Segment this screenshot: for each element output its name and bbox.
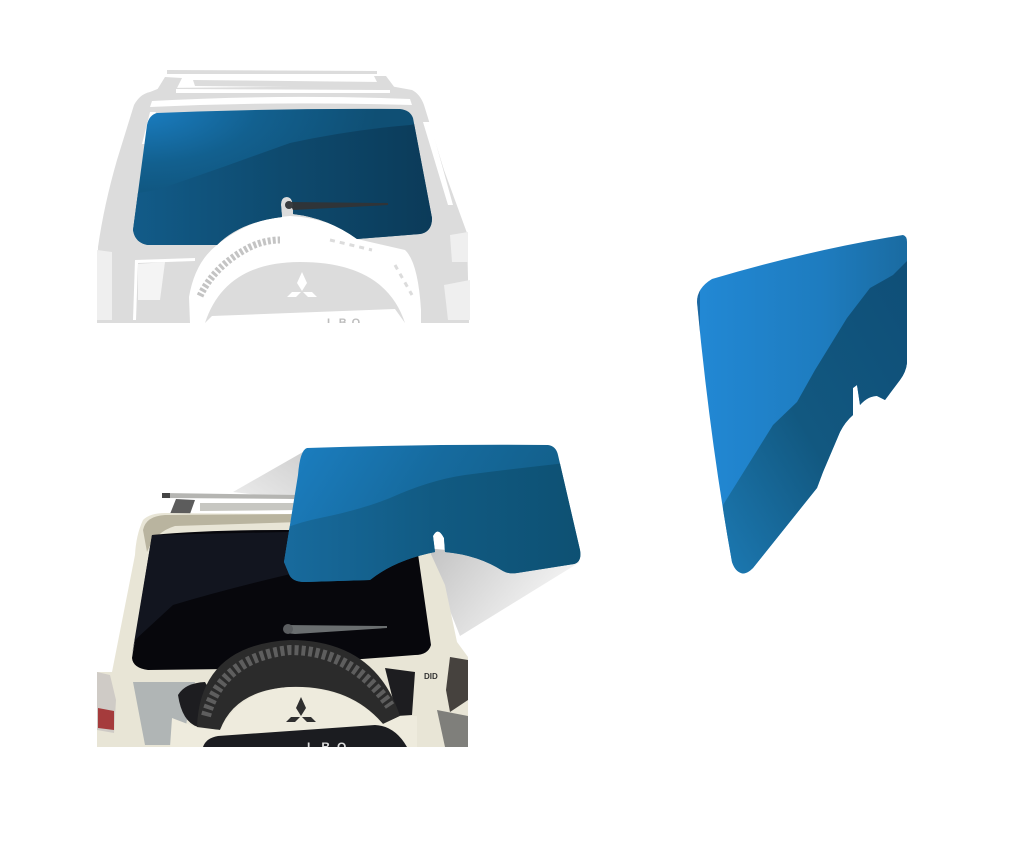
spoiler	[143, 514, 300, 552]
plate outline	[205, 309, 405, 323]
white spoiler lines	[142, 89, 453, 205]
logo	[286, 697, 316, 722]
white spare tyre band	[189, 216, 421, 323]
grey car silhouette	[97, 86, 469, 323]
tail lamp right	[446, 657, 468, 712]
top panel plate text: LBO	[327, 317, 365, 329]
side and lamp details	[97, 232, 470, 320]
enlarged blue glass callout	[284, 444, 580, 582]
callout projection shading, lower	[425, 548, 580, 636]
plate text: LBO	[307, 740, 353, 754]
infographic canvas	[97, 70, 907, 747]
logo	[287, 272, 317, 297]
panel: photo of car with enlarged glass callout	[97, 493, 468, 754]
panel: angled view of blue glass	[690, 230, 912, 580]
spare tyre	[197, 640, 400, 730]
car body	[97, 513, 468, 747]
gaps beside tyre	[178, 668, 415, 727]
panel: line-art car with highlighted rear glass	[97, 70, 470, 329]
wheel cover	[170, 687, 417, 747]
callout projection shading, upper	[233, 452, 303, 500]
rear window dark glass	[132, 530, 431, 670]
roof rack strips	[157, 70, 395, 90]
number plate	[203, 725, 407, 747]
wiper arm	[289, 202, 388, 210]
bumper panels	[133, 682, 195, 745]
roof rack	[163, 493, 300, 499]
badge: DID	[424, 672, 438, 681]
blue rear glass	[133, 108, 432, 245]
tyre tread speckle	[200, 240, 280, 296]
wiper	[285, 625, 387, 634]
tail lamp left	[97, 672, 116, 733]
